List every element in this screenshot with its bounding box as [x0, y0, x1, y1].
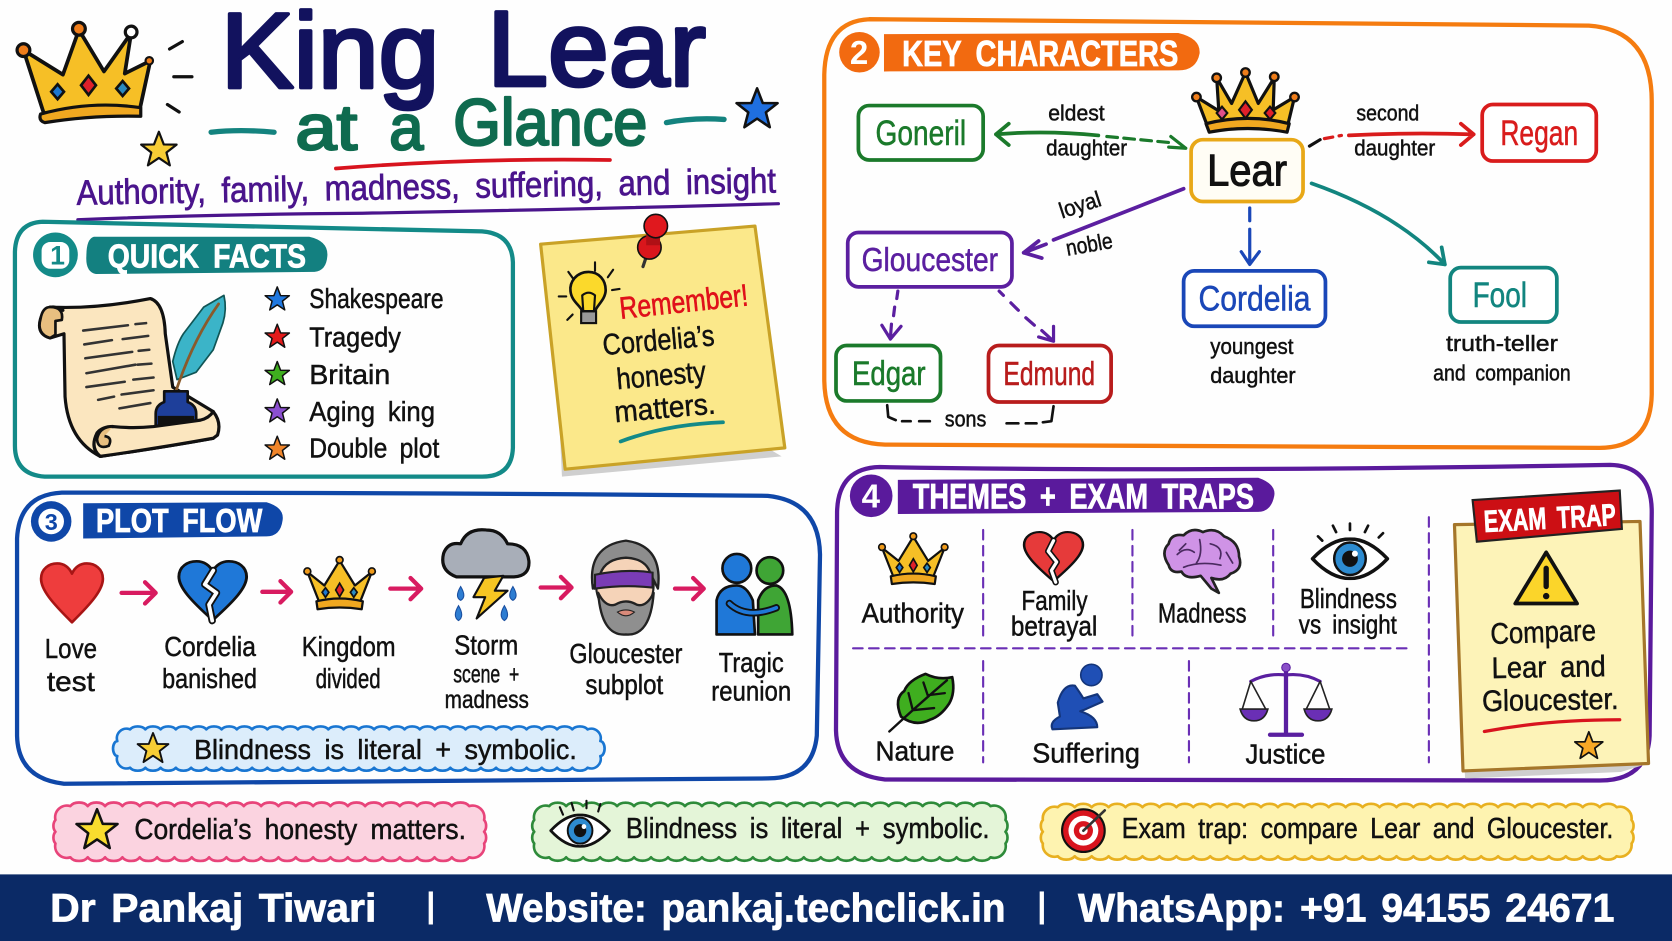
- theme: family betrayal: betrayal: [1011, 611, 1097, 642]
- node: Cordelia: [1184, 271, 1325, 326]
- text: compare message: Lear and: [1491, 650, 1606, 685]
- step: Gloucester subplot: [569, 541, 682, 700]
- node: Gloucester: Gloucester: [862, 242, 998, 279]
- theme: blindness vs insight: Blindness: [1300, 583, 1397, 614]
- node: Regan: Regan: [1500, 114, 1578, 153]
- ribbon: exam trap: EXAM TRAP: [1483, 497, 1617, 539]
- icon: warning triangle: [1515, 552, 1577, 604]
- callout: exam trap compare: [1041, 804, 1634, 860]
- labels: relationships: youngest: [1210, 334, 1294, 359]
- list: facts: Double plot: [309, 432, 440, 463]
- labels: relationships: daughter: [1046, 136, 1128, 161]
- arrow: Lear to Fool: [1312, 183, 1445, 264]
- list: facts: Britain: [309, 359, 390, 390]
- step: storm scene: madness: [445, 687, 529, 714]
- panel: themes and exam traps: [836, 465, 1652, 781]
- text: compare message: Gloucester.: [1482, 683, 1619, 718]
- labels: relationships: [1046, 100, 1571, 388]
- text: note message: [601, 319, 723, 441]
- node: Cordelia: Cordelia: [1199, 279, 1311, 318]
- list: facts: Tragedy: [309, 322, 401, 353]
- theme: suffering: Suffering: [1032, 737, 1140, 768]
- step: tragic reunion: Tragic: [719, 647, 784, 678]
- step: Gloucester subplot: Gloucester: [569, 638, 682, 669]
- arrow: plot 5: [675, 578, 704, 599]
- badge: 3: [31, 501, 71, 542]
- panel: key characters: [824, 19, 1652, 448]
- node: Edmund: Edmund: [1003, 356, 1095, 393]
- theme: blindness vs insight: vs insight: [1299, 611, 1397, 639]
- badge: 4: 4: [862, 479, 881, 516]
- badge: 1: 1: [50, 240, 65, 270]
- badge: 3: 3: [45, 509, 58, 535]
- node: Lear: [1191, 140, 1303, 202]
- text: compare message: Compare: [1490, 614, 1596, 651]
- callout: blindness is literal and symbolic: [532, 801, 1007, 861]
- icon: blue star: [737, 88, 778, 127]
- icon: title crown: [17, 22, 192, 123]
- list: facts: Shakespeare: [309, 283, 444, 314]
- callout: Cordelia's honesty: Cordelia’s honesty matters.: [134, 814, 466, 846]
- heading: key characters: KEY CHARACTERS: [902, 33, 1178, 74]
- icon: crown over Lear: [1192, 68, 1299, 132]
- step: storm scene: [443, 530, 529, 714]
- heading: quick facts: QUICK FACTS: [108, 239, 306, 276]
- step: storm scene: Storm: [454, 630, 518, 661]
- step: Cordelia banished: banished: [162, 663, 257, 694]
- badge: 2: 2: [850, 35, 868, 72]
- text: note message: honesty: [615, 355, 707, 396]
- theme: authority: [862, 533, 964, 629]
- arrow: plot 3: [390, 578, 421, 599]
- theme: authority: Authority: [862, 598, 964, 629]
- badge: 4: [850, 475, 893, 517]
- list: facts: [265, 283, 444, 463]
- callout: Cordelia's honesty: [53, 802, 486, 861]
- theme: suffering: [1032, 664, 1140, 768]
- badge: 1: [33, 232, 78, 277]
- arrow: Lear to Gloucester: [1024, 189, 1184, 258]
- step: Kingdom divided: divided: [316, 663, 381, 694]
- node: Gloucester: [848, 232, 1012, 287]
- theme: madness: [1158, 530, 1247, 629]
- arrow: plot 1: [122, 582, 156, 604]
- text: remember: Remember!: [618, 277, 750, 326]
- bracket: sons: sons: [945, 407, 986, 432]
- arrow: plot 2: [262, 581, 291, 602]
- node: Goneril: Goneril: [875, 114, 966, 153]
- heading: themes and exam traps: THEMES + EXAM TRAPS: [913, 478, 1254, 517]
- sticky note: remember: [541, 214, 785, 477]
- node: Lear: Lear: [1207, 146, 1287, 196]
- step: Kingdom divided: [302, 557, 396, 694]
- arrow: Lear to Cordelia: [1241, 208, 1259, 264]
- labels: relationships: loyal: [1056, 186, 1104, 223]
- theme: justice: [1240, 663, 1332, 769]
- subtitle: at a Glance: at: [295, 91, 357, 163]
- arrow: Lear to Goneril: [996, 124, 1186, 148]
- icon: scroll and quill: [40, 295, 225, 456]
- list: facts: Aging king: [309, 396, 435, 427]
- theme: blindness vs insight: [1299, 524, 1397, 639]
- step: Gloucester subplot: subplot: [585, 669, 664, 700]
- footer: WhatsApp: +91 94155 24671: [1078, 886, 1614, 930]
- text: note message: Cordelia’s: [601, 319, 716, 362]
- step: Cordelia banished: [162, 561, 257, 694]
- panel: quick facts: [15, 222, 513, 477]
- icon: yellow star: [141, 132, 177, 165]
- theme: family betrayal: Family: [1022, 585, 1088, 616]
- bracket: sons: [887, 405, 1054, 432]
- labels: relationships: truth-teller: [1446, 331, 1558, 356]
- arrow: Lear to Regan: [1309, 124, 1474, 146]
- badge: 2: [839, 32, 880, 73]
- node: Goneril: [858, 106, 983, 160]
- labels: relationships: daughter: [1210, 363, 1296, 388]
- ribbon: exam trap: [1473, 491, 1622, 542]
- subtitle: at a Glance: [211, 86, 724, 168]
- theme: nature: [875, 674, 954, 766]
- labels: relationships: second: [1356, 100, 1419, 125]
- step: storm scene: scene +: [453, 661, 519, 688]
- step: tragic reunion: [711, 554, 792, 707]
- node: Edgar: Edgar: [852, 355, 926, 393]
- node: Regan: [1482, 104, 1596, 161]
- text: note message: matters.: [613, 388, 717, 429]
- step: love test: Love: [45, 633, 97, 664]
- node: Fool: [1450, 268, 1557, 322]
- arrow: Gloucester to Edmund: [999, 291, 1054, 341]
- step: Kingdom divided: Kingdom: [302, 631, 396, 662]
- theme: family betrayal: [1011, 532, 1097, 642]
- callout: blindness: Blindness is literal + symbolic.: [194, 734, 577, 765]
- step: love test: [41, 563, 103, 697]
- icon: red pin: [638, 214, 668, 267]
- subtitle: at a Glance: a: [389, 91, 424, 163]
- panel: plot flow: [17, 493, 820, 784]
- theme: justice: Justice: [1245, 738, 1325, 769]
- step: tragic reunion: reunion: [711, 676, 791, 707]
- icon: light bulb: [559, 262, 620, 323]
- node: Fool: Fool: [1473, 276, 1527, 315]
- footer: Dr Pankaj Tiwari: [50, 886, 376, 930]
- title: [221, 0, 706, 110]
- labels: relationships: daughter: [1354, 136, 1436, 161]
- icon: note star: [1575, 732, 1603, 758]
- labels: relationships: eldest: [1048, 100, 1105, 125]
- sticky note: exam trap: [1454, 491, 1649, 778]
- arrow: plot 4: [541, 577, 572, 598]
- tagline: Authority, family, madness, suffering, and insight: [76, 162, 777, 213]
- callout: blindness is literal and symbolic: Blindness is literal + symbolic.: [626, 813, 990, 845]
- arrow: Gloucester to Edgar: [882, 291, 901, 339]
- footer: Website: pankaj.techclick.in: [486, 886, 1006, 930]
- step: love test: test: [47, 666, 95, 697]
- heading: plot flow: PLOT FLOW: [96, 503, 263, 540]
- footer: [0, 874, 1672, 941]
- labels: relationships: noble: [1064, 228, 1114, 261]
- theme: madness: Madness: [1158, 598, 1247, 629]
- callout: blindness: [113, 726, 605, 771]
- step: Cordelia banished: Cordelia: [164, 631, 256, 662]
- callout: exam trap compare: Exam trap: compare Lear and Gloucester.: [1122, 813, 1613, 845]
- subtitle: at a Glance: Glance: [453, 86, 647, 160]
- theme: nature: Nature: [875, 735, 954, 766]
- node: Edmund: [988, 345, 1111, 402]
- labels: relationships: and companion: [1433, 361, 1571, 386]
- text: compare message: [1482, 614, 1620, 731]
- node: Edgar: [836, 345, 940, 401]
